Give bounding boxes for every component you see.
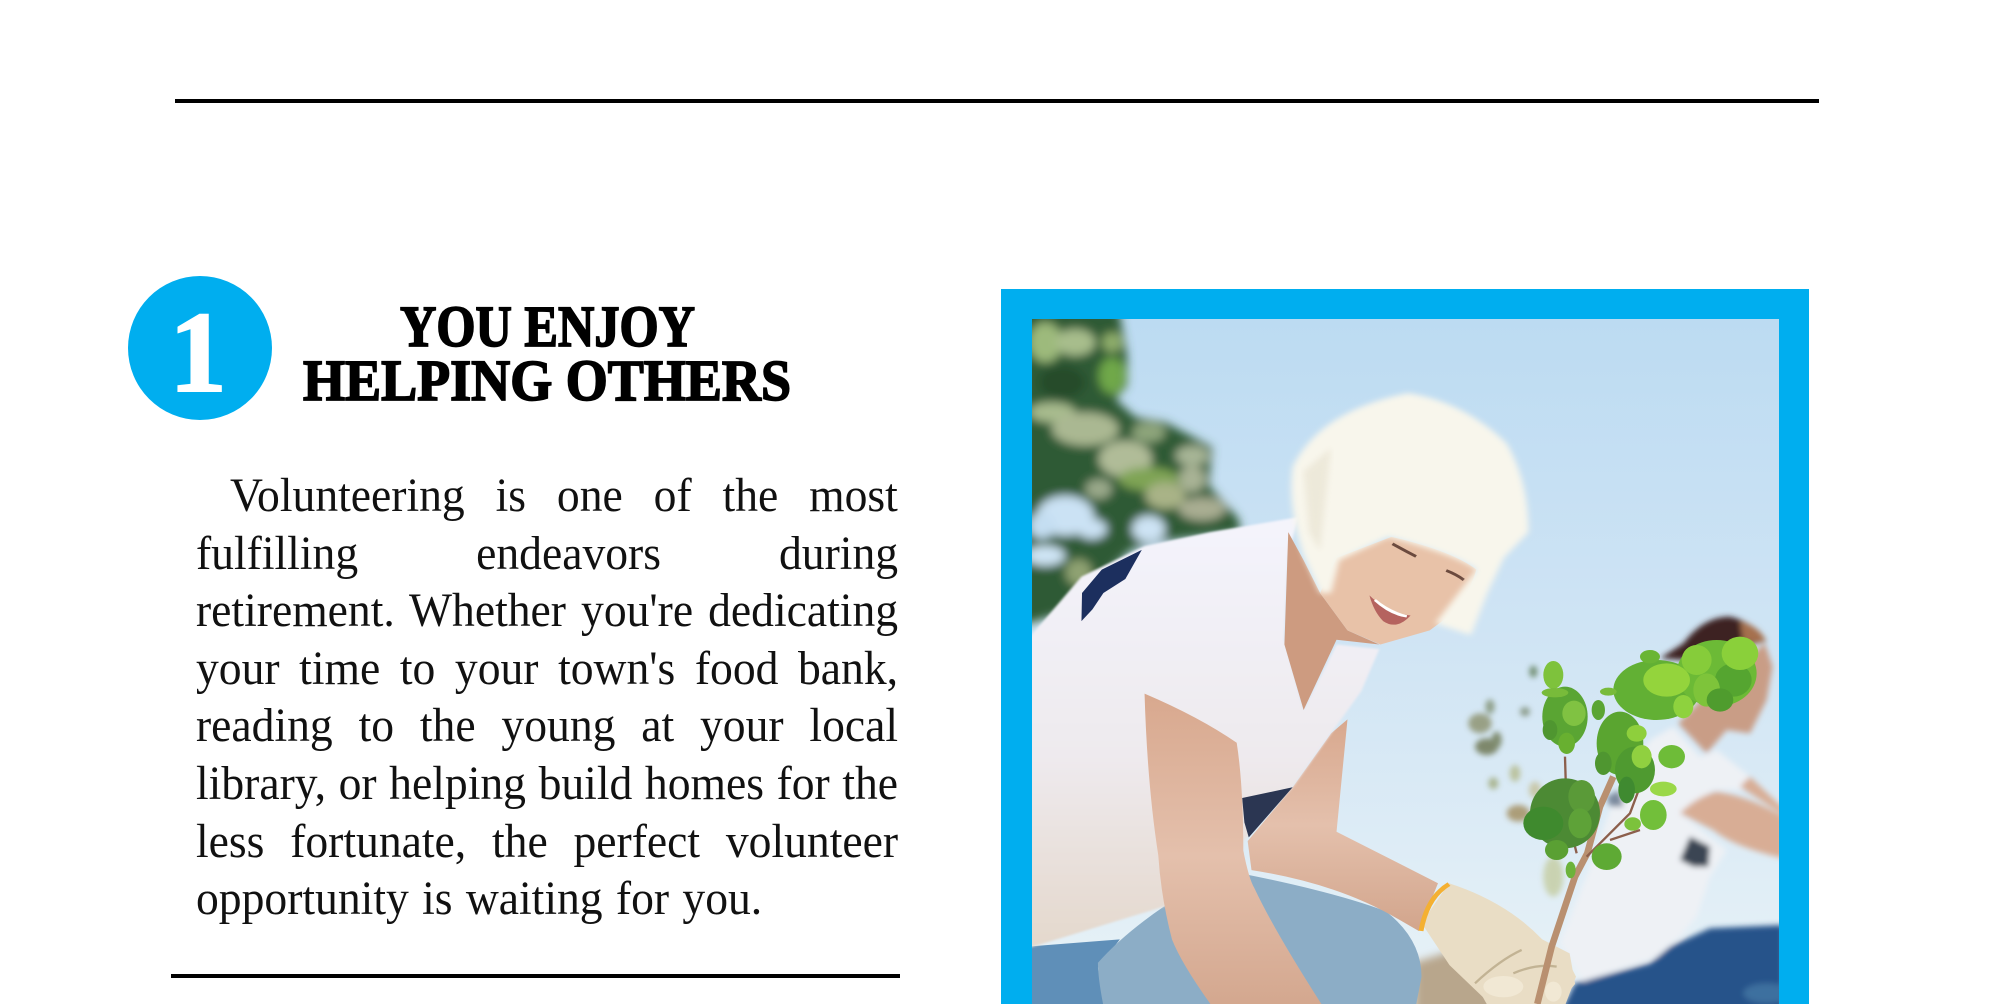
neck — [1284, 532, 1379, 710]
body paragraph: opportunity is waiting for you. — [196, 872, 762, 925]
body paragraph: retirement. Whether you're dedicating — [196, 584, 898, 637]
ground — [1416, 949, 1487, 1004]
glove — [1422, 883, 1575, 1004]
mouth — [1369, 595, 1411, 625]
leaves — [1523, 637, 1758, 878]
photo panel: volunteers planting a tree — [1001, 289, 1809, 1004]
knee jeans — [1098, 874, 1422, 1004]
background sapling — [1468, 666, 1563, 897]
second woman — [1560, 617, 1790, 1004]
hair — [1660, 617, 1765, 660]
glove lower detail and stem — [1473, 637, 1758, 1004]
number badge: 1 — [169, 289, 227, 416]
number badge — [128, 276, 272, 420]
near arm — [1145, 694, 1331, 1004]
bracelet — [1421, 884, 1449, 931]
body paragraph — [196, 469, 898, 925]
arm — [1680, 792, 1783, 858]
far arm — [1248, 719, 1438, 931]
heading — [303, 294, 791, 413]
body paragraph: library, or helping build homes for the — [196, 757, 898, 810]
shirt — [1560, 727, 1750, 982]
face and neck — [1678, 643, 1773, 753]
stem and branches — [1537, 720, 1640, 1004]
heading: YOU ENJOY — [400, 294, 695, 359]
face — [1320, 537, 1476, 644]
body paragraph: fulfilling endeavors during — [196, 527, 898, 580]
main woman — [1029, 393, 1575, 1004]
body paragraph: less fortunate, the perfect volunteer — [196, 815, 898, 868]
lower jeans — [1029, 939, 1120, 1004]
blue frame — [1001, 289, 1809, 1004]
body paragraph: your time to your town's food bank, — [196, 642, 898, 695]
body paragraph: Volunteering is one of the most — [230, 469, 898, 522]
shirt print — [1680, 837, 1710, 867]
top rule — [175, 99, 1819, 103]
tree — [1022, 309, 1240, 626]
jeans — [1560, 925, 1783, 1004]
hair — [1291, 393, 1528, 635]
photo content — [1022, 309, 1790, 1004]
bottom rule — [171, 974, 900, 978]
shirt — [1029, 517, 1379, 948]
print on shirt — [1081, 550, 1142, 621]
body paragraph: reading to the young at your local — [196, 699, 898, 752]
